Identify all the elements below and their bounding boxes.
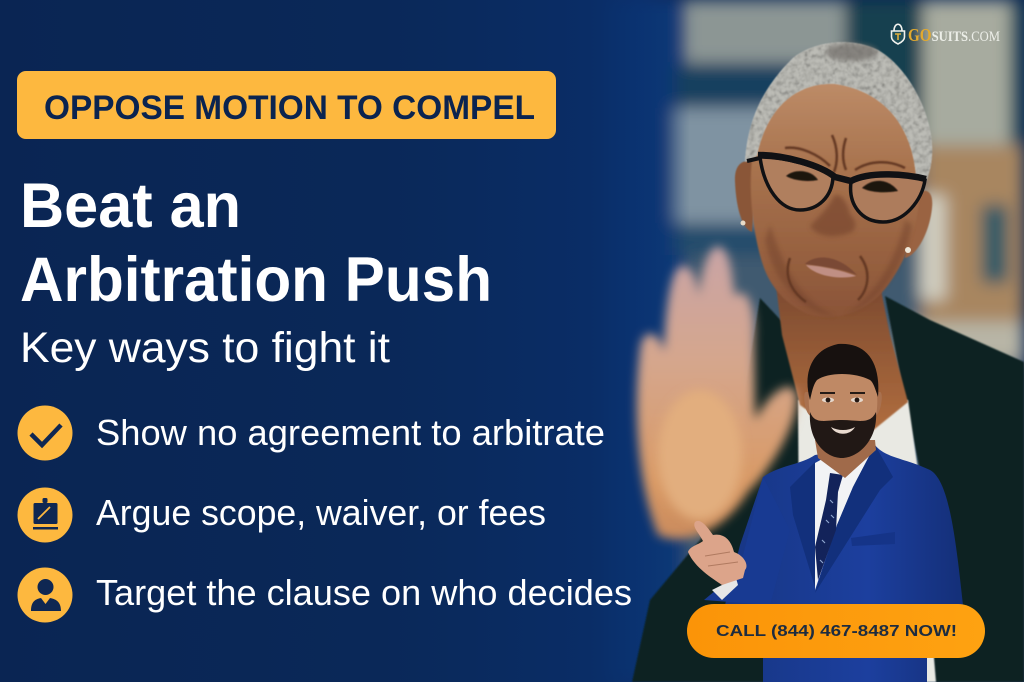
hand highlight [658,390,742,520]
brow and frown lines [785,135,905,302]
list item: no agreement [18,406,605,460]
title: Beat an [20,171,241,241]
pointing hand [688,521,747,585]
heading badge: oppose motion to compel [17,71,556,139]
tie [815,473,843,580]
logo: GoSuits.com [892,24,1000,45]
face [751,80,919,317]
title: Arbitration Push [20,245,492,315]
item text: Show no agreement to arbitrate [96,412,605,453]
ear right [905,191,932,258]
woman photo subject [632,42,1024,682]
eye left [786,171,818,181]
lens tint left [760,157,833,210]
right lapel [815,445,893,593]
logo wordmark: GOSUITS.COM [908,25,1000,45]
glasses [747,155,926,222]
ears [804,392,882,416]
icon: person [18,568,72,622]
blouse [798,400,936,682]
icon: check mark [18,406,72,460]
eye right [862,181,898,192]
jacket [632,296,1024,682]
neck [776,285,908,445]
eyes [820,393,865,402]
blurred raised hand [637,246,797,539]
cheek shading [765,220,912,316]
head [809,366,877,452]
hair [807,344,878,400]
suit body [725,445,963,682]
call to action button [687,604,985,658]
list item: clause on who decides [18,568,632,622]
shirt [815,445,875,590]
icon: lock [892,24,904,44]
background photo: blurred office [600,0,1024,682]
lawyer photo cutout [688,344,963,682]
mouth [805,258,857,278]
title [20,171,492,315]
panel: navy background fade [0,0,690,682]
nose [810,195,855,236]
neck [815,440,876,478]
earring left [740,220,746,226]
subtitle: Key ways to fight it [20,324,390,372]
call to action button: CALL (844) 467-8487 NOW! [716,623,957,640]
item text: Target the clause on who decides [96,572,632,613]
hair [745,42,932,182]
cuff [712,578,738,600]
beard [810,412,876,458]
earring right [905,247,911,253]
item text: Argue scope, waiver, or fees [96,492,546,533]
breast pocket [851,532,895,546]
icon: clipboard [18,488,72,542]
left lapel [790,462,815,587]
lens tint right [851,175,925,222]
hair shadow [826,43,878,61]
list item: scope, waiver, fees [18,488,546,542]
ear left [735,161,757,232]
left sleeve [704,477,790,605]
heading badge: oppose motion to compel: OPPOSE MOTION TO COMPEL [44,89,535,127]
smile [831,427,855,434]
